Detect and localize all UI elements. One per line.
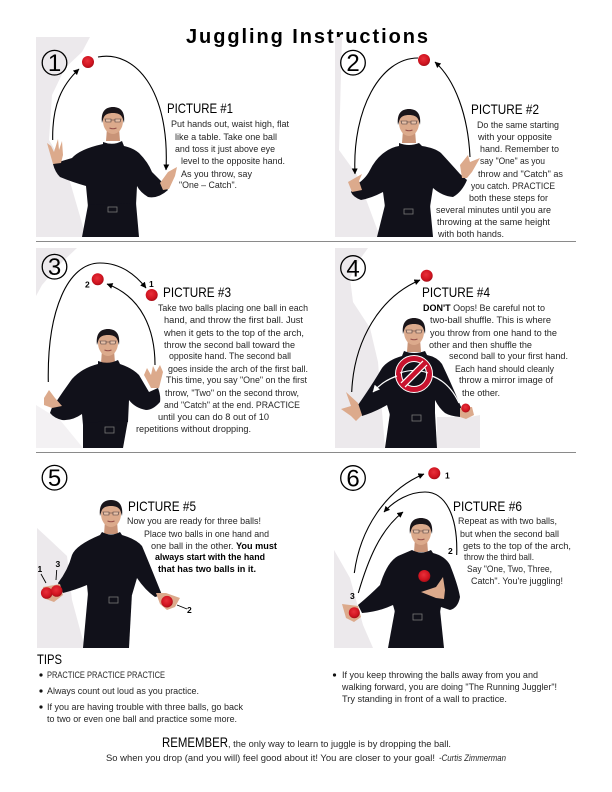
text: picture 6: Say "One, Two, Three, [467, 564, 552, 574]
lower backdrop 3 [36, 405, 83, 448]
panel: picture 1 [36, 37, 289, 237]
text: picture 4: other and then shuffle the [429, 340, 532, 350]
icon: no symbol [398, 358, 430, 390]
arrow: ball 1 arc [354, 474, 424, 573]
text: picture 1: Put hands out, waist high, flat [171, 119, 289, 129]
text: picture 2: with your opposite [477, 132, 552, 142]
balls in hands [41, 585, 173, 608]
juggler 3 [44, 329, 163, 448]
text: picture 4: DON'T Oops! Be careful not to [423, 303, 545, 313]
panel: picture 2 [335, 37, 563, 239]
ball 2 [92, 273, 104, 285]
text: picture 3: This time, you say "One" on the first [166, 375, 307, 385]
arrow: down to hand [355, 58, 418, 174]
panel: picture 5 [37, 465, 277, 648]
number 4: 4 [346, 255, 360, 282]
text: picture 5: Place two balls in one hand and [144, 529, 269, 539]
ball labels: 1 [149, 279, 154, 289]
text: picture 3: repetitions without dropping. [136, 424, 251, 434]
ball in hand [461, 404, 470, 412]
text: picture 4: second ball to your first hand. [449, 351, 568, 361]
panel: picture 6 [334, 465, 571, 648]
text: picture 2: say "One" as you [480, 156, 545, 166]
text: picture 5: that has two balls in it. [158, 564, 256, 574]
ball 4 [421, 270, 433, 282]
juggler 2 [348, 109, 480, 237]
text: picture 1 [171, 119, 289, 190]
heading: picture 2: PICTURE #2 [471, 101, 539, 117]
title: Juggling Instructions [186, 26, 428, 48]
text: picture 4: throw a mirror image of [459, 375, 554, 385]
tips left column: Always count out loud as you practice. [47, 686, 199, 696]
text: picture 4: Each hand should cleanly [455, 364, 554, 374]
text: picture 2: several minutes until you are [436, 205, 551, 215]
ball labels and leader lines [38, 559, 192, 615]
arrow: ball 3 arc [358, 512, 403, 593]
text: picture 3: Take two balls placing one ball in each [158, 303, 308, 313]
arrow: up to ball [53, 69, 79, 140]
text: picture 3: throw the second ball toward the [164, 340, 295, 350]
ball labels: 2 [448, 546, 453, 556]
text: picture 5: always start with the hand [155, 552, 265, 562]
text: picture 2: with both hands. [437, 229, 504, 239]
tips left column: to two or even one ball and practice some more. [47, 714, 237, 724]
number 3: 3 [48, 254, 61, 281]
ball 2 [418, 54, 430, 66]
number 4 [341, 255, 365, 282]
number 6 [341, 465, 365, 492]
photo backdrop 4 [335, 248, 385, 448]
remember heading: REMEMBER [162, 734, 228, 750]
number 3 [42, 254, 67, 281]
photo backdrop 5 [37, 528, 85, 648]
remember line: , the only way to learn to juggle is by dropping the ball. [228, 739, 451, 749]
arrow: up to ball [435, 62, 470, 157]
ball labels and leader lines: 3 [56, 559, 60, 569]
number 5: 5 [48, 465, 61, 492]
closing message [106, 734, 506, 763]
number 6: 6 [346, 465, 360, 492]
text: picture 6: gets to the top of the arch, [463, 541, 571, 551]
panel: picture 3 [36, 248, 308, 448]
tips right column: walking forward, you are doing "The Running Juggler"! [341, 682, 557, 692]
text: picture 3 [136, 303, 308, 434]
text: picture 1: and toss it just above eye [175, 144, 275, 154]
ball labels and leader lines: 1 [38, 564, 42, 574]
arrow: white shuffle [373, 376, 459, 403]
balls [349, 467, 440, 618]
number 1: 1 [48, 50, 61, 77]
photo backdrop 6 [334, 550, 373, 648]
ball labels [85, 279, 154, 290]
text: picture 1: "One – Catch". [179, 180, 237, 190]
text: picture 2: throw and "Catch" as [478, 169, 563, 179]
tips left column: PRACTICE PRACTICE PRACTICE [47, 670, 165, 680]
heading: picture 4: PICTURE #4 [422, 284, 490, 300]
panel: picture 4 [335, 248, 568, 448]
arrow: throw [352, 280, 420, 392]
tips left column [39, 670, 243, 724]
text: picture 3: goes inside the arch of the first ball. [168, 364, 308, 374]
photo backdrop 2 [335, 37, 380, 237]
text: picture 6 [458, 516, 571, 586]
ball 1 [82, 56, 94, 68]
arrow: down to hand [98, 56, 166, 170]
attribution: -Curtis Zimmerman [439, 753, 506, 763]
heading: picture 1: PICTURE #1 [167, 100, 233, 116]
photo backdrop 1 [36, 37, 90, 237]
text: picture 6: but when the second ball [460, 529, 559, 539]
ball 1 [146, 289, 158, 301]
text: picture 3: opposite hand. The second ball [169, 351, 291, 361]
text: picture 5: one ball in the other. You must [151, 541, 277, 551]
text: picture 4: you throw from one hand to the [430, 328, 557, 338]
heading: tips: TIPS [37, 651, 62, 667]
tips right column: Try standing in front of a wall to practice. [342, 694, 507, 704]
text: picture 3: throw, "Two" on the second throw, [165, 388, 299, 398]
arrow: first ball arc [48, 263, 146, 382]
text: picture 2 [436, 120, 563, 239]
text: picture 1: level to the opposite hand. [181, 156, 285, 166]
text: picture 2: both these steps for [469, 193, 548, 203]
juggler 1 [47, 107, 177, 237]
text: picture 6: throw the third ball. [464, 552, 534, 562]
text: picture 5 [127, 516, 277, 574]
number 2: 2 [346, 50, 360, 77]
text: picture 3: until you can do 8 out of 10 [158, 412, 269, 422]
panel: tips [37, 651, 557, 724]
text: picture 5: Now you are ready for three balls! [127, 516, 261, 526]
divider lines [36, 241, 576, 453]
arrow: second ball arc [107, 284, 155, 365]
tips left column: If you are having trouble with three balls, go back [47, 702, 243, 712]
text: picture 4 [423, 303, 568, 398]
text: picture 3: when it gets to the top of the arch, [163, 328, 304, 338]
tips right column: If you keep throwing the balls away from you and [342, 670, 538, 680]
text: picture 4: the other. [462, 388, 500, 398]
closing line: So when you drop (and you will) feel good about it! You are closer to your goal! [106, 753, 435, 763]
right backdrop 4 [437, 415, 480, 448]
text: picture 6: Catch". You're juggling! [471, 576, 563, 586]
heading: picture 5: PICTURE #5 [128, 498, 196, 514]
text: picture 3: hand, and throw the first ball. Just [164, 315, 304, 325]
text: picture 1: like a table. Take one ball [175, 132, 277, 142]
text: picture 4: two-ball shuffle. This is where [430, 315, 551, 325]
juggler 6 [342, 518, 460, 648]
text: picture 2: you catch. PRACTICE [471, 181, 555, 191]
text: picture 3: and "Catch" at the end. PRACTICE [164, 400, 300, 410]
heading: picture 6: PICTURE #6 [453, 498, 522, 514]
arrow: ball 2 arc [384, 492, 457, 555]
juggler 5 [43, 500, 180, 648]
text: picture 2: throwing at the same height [437, 217, 550, 227]
ball labels: 1 [445, 470, 450, 480]
text: picture 2: Do the same starting [477, 120, 559, 130]
photo backdrop 3 [36, 248, 77, 296]
ball labels: 3 [350, 591, 355, 601]
ball labels [350, 470, 453, 601]
juggler 4 [341, 318, 474, 448]
ball labels and leader lines: 2 [187, 605, 192, 615]
text: picture 1: As you throw, say [181, 169, 252, 179]
text: picture 6: Repeat as with two balls, [458, 516, 557, 526]
number 5 [42, 465, 67, 492]
number 1 [42, 50, 67, 77]
tips right column [333, 670, 557, 704]
heading: picture 3: PICTURE #3 [163, 284, 231, 300]
number 2 [341, 50, 365, 77]
ball labels: 2 [85, 280, 90, 290]
text: picture 2: hand. Remember to [480, 144, 559, 154]
